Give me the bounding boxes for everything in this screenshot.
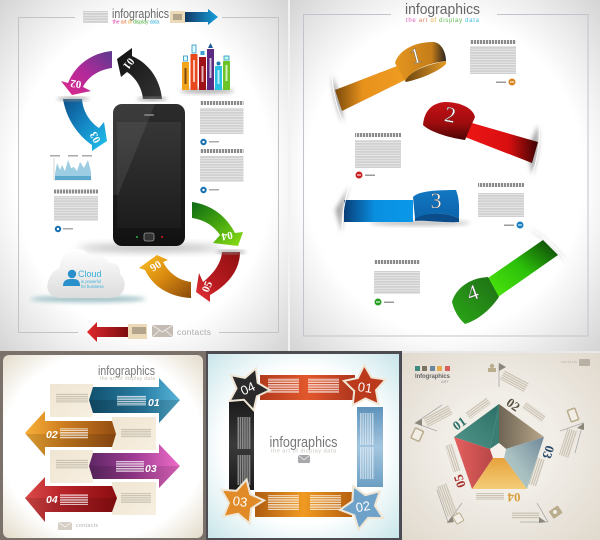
header: title with arrow: infographics: [112, 7, 169, 21]
label 02: 02: [504, 395, 523, 414]
arrow 01 black: [117, 48, 167, 100]
flag note: printer: [559, 408, 584, 458]
area chart: [50, 155, 92, 180]
panel: smartphone infographic: [0, 0, 288, 351]
footer: contacts: contacts: [177, 327, 211, 337]
left band black: [229, 400, 254, 490]
star 04 black: 04: [238, 379, 258, 398]
arrow 01 blue: [50, 378, 180, 423]
arrow 05 red: 05: [200, 279, 215, 294]
title: [98, 364, 155, 382]
label 05: 05: [450, 472, 469, 490]
cloud badge: for business: [81, 284, 104, 289]
text block B: [355, 133, 401, 178]
cloud badge: is powerful: [81, 279, 101, 284]
ribbon 2 red: 2: [443, 101, 458, 128]
logo: colour squares and heading: ART: [441, 379, 449, 384]
ribbon 3 blue: [335, 185, 470, 233]
arrow 02 purple: 02: [69, 77, 82, 90]
panel: pentagon infographic: [400, 351, 600, 540]
flag note: tablet: [411, 405, 453, 442]
title: [405, 1, 480, 24]
text block right bottom: [200, 149, 244, 193]
label 04: 04: [507, 490, 520, 505]
arrow 05 red: [196, 250, 246, 302]
pentagon chart: [454, 404, 544, 489]
arrow 04 red: [25, 477, 156, 522]
arrow 04 green: 04: [220, 229, 234, 242]
logo: colour squares and heading: [415, 366, 451, 384]
ribbon 3 blue: 3: [430, 188, 442, 213]
star 04 black: [222, 361, 275, 413]
title: infographics: [405, 1, 480, 18]
right band blue: [357, 407, 383, 487]
arrow 03 purple: [50, 444, 180, 488]
cloud badge: Cloud: [78, 269, 102, 279]
star 03 orange: [215, 474, 268, 525]
text block D: [374, 260, 420, 306]
smartphone: [78, 104, 222, 251]
text block C: [478, 183, 524, 228]
label 01: 01: [450, 414, 469, 433]
star 01 red: [343, 364, 387, 406]
arrow 06 orange: 06: [147, 257, 163, 274]
label 05: [445, 443, 469, 490]
title: the art of display data: [271, 448, 337, 454]
ribbon 1 orange: [332, 42, 446, 124]
text block left: [54, 190, 98, 232]
contacts: [58, 522, 98, 530]
title: the art of display data: [100, 376, 155, 382]
label 01: [450, 397, 491, 433]
panel: square star infographic: [206, 351, 402, 540]
title: infographics: [98, 364, 155, 378]
contacts tag: contacts: [561, 360, 577, 364]
star 02 blue: [333, 477, 391, 533]
ribbon 4 green: [452, 228, 567, 324]
arrow 03 blue: 03: [87, 129, 103, 145]
text block right top: [200, 101, 244, 145]
flag note: camera: [512, 503, 563, 523]
ribbon 2 red: [423, 101, 539, 175]
cloud badge: [30, 249, 146, 302]
arrow 04 green: [192, 202, 243, 246]
ribbon 1 orange: 1: [407, 42, 424, 69]
star 02 blue: 02: [354, 498, 371, 515]
contacts: contacts: [76, 523, 98, 529]
star 03 orange: 03: [232, 493, 248, 510]
label 03: 03: [539, 444, 558, 461]
arrow 02 orange: [25, 411, 156, 456]
title: the art of display data: [406, 18, 480, 24]
flag note: stamp: [488, 363, 529, 392]
text block A: [470, 40, 516, 86]
bottom band orange: [255, 492, 352, 517]
arrow 01 blue: 01: [148, 397, 160, 409]
arrow 06 orange: [139, 255, 191, 298]
arrow 02 orange: 02: [46, 429, 58, 441]
arrow 02 purple: [61, 51, 112, 95]
ribbon 4 green: 4: [463, 279, 482, 306]
contacts tag: [561, 359, 590, 366]
arrow 03 blue: [57, 98, 107, 151]
bar chart with icons: [180, 43, 234, 94]
flag note: document: [437, 483, 464, 524]
label 02: [504, 395, 546, 422]
header: title with arrow: [83, 7, 218, 26]
header: title with arrow: the art of display data: [112, 20, 160, 26]
label 03: [529, 444, 558, 487]
star 01 red: 01: [357, 379, 373, 396]
arrow 01 black: 01: [120, 55, 136, 71]
title: infographics: [270, 434, 338, 451]
top band red: [260, 375, 355, 400]
panel: ribbon infographic: [290, 0, 600, 351]
panel: arrow list infographic: [0, 351, 206, 540]
label 04: [476, 490, 520, 505]
title: [270, 434, 338, 463]
arrow 03 purple: 03: [145, 463, 157, 475]
divider between panels: [288, 0, 290, 351]
arrow 04 red: 04: [46, 494, 58, 506]
logo: colour squares and heading: Infographics: [415, 374, 451, 380]
footer: contacts: [87, 322, 211, 342]
